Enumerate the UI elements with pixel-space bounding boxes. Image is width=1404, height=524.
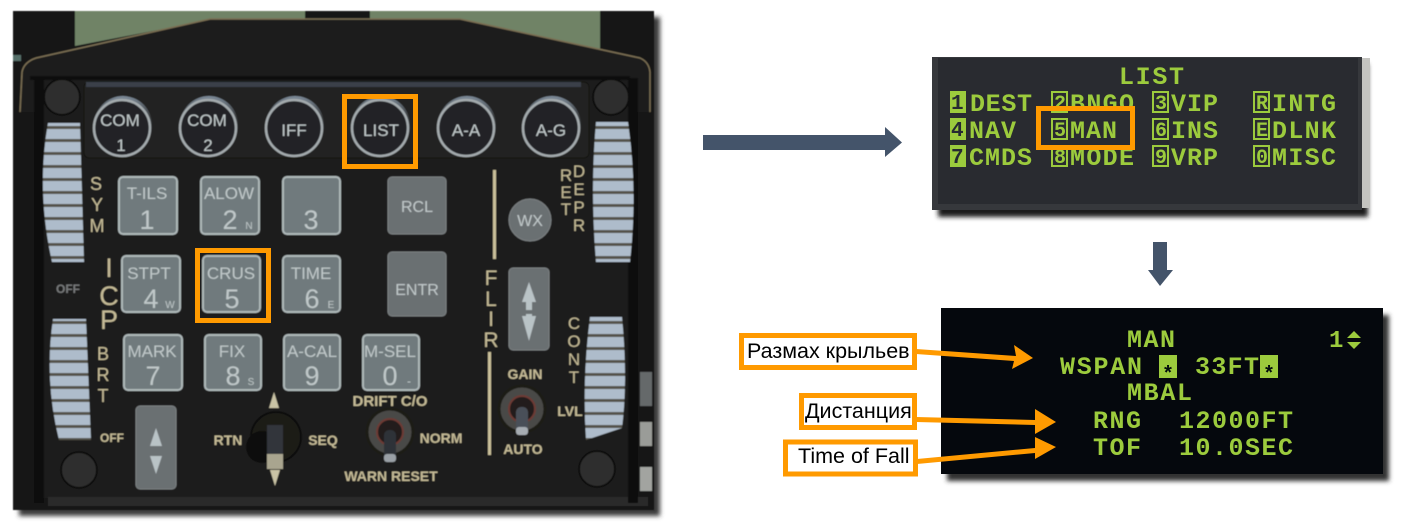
panel: LIST display: [932, 57, 1370, 217]
panel labels: GAIN: [508, 366, 542, 382]
panel labels: DRIFT C/O: [352, 393, 428, 410]
keypad keys: M-SEL: [364, 342, 416, 361]
keypad keys: E: [328, 300, 335, 311]
panel: LIST display: LIST: [1119, 63, 1184, 92]
panel: MAN display: [941, 308, 1389, 481]
arrow: LIST display to MAN display: [1148, 242, 1173, 286]
photo: ICP panel: [13, 11, 660, 516]
panel labels: I: [488, 308, 494, 331]
panel labels: P: [573, 198, 585, 217]
menu row 2: [950, 117, 1336, 146]
panel labels: R: [573, 216, 585, 235]
arrow: panel to LIST display: [703, 127, 902, 157]
panel labels: I: [105, 253, 113, 283]
callout: LIST button highlight: [344, 96, 416, 166]
menu row 2: INS: [1171, 117, 1218, 146]
menu row 1: BNGO: [1070, 90, 1134, 119]
panel labels: OFF: [56, 282, 80, 296]
panel labels: B: [97, 344, 109, 364]
panel labels: T: [561, 200, 571, 219]
panel labels: SEQ: [308, 432, 338, 448]
panel labels: WARN RESET: [344, 468, 438, 484]
menu row 3: MODE: [1070, 144, 1134, 173]
toggles: [246, 386, 545, 486]
panel labels: AUTO: [503, 441, 543, 457]
panel: MAN display: MBAL: [1127, 379, 1192, 408]
callout: CRUS key highlight: [198, 250, 268, 320]
menu row 3: 9: [1155, 147, 1167, 170]
menu row 3: MISC: [1272, 144, 1336, 173]
menu row 3: 8: [1054, 147, 1066, 170]
keypad keys: [119, 177, 551, 489]
panel labels: O: [567, 332, 581, 351]
keypad keys: 0: [382, 361, 398, 391]
panel labels: E: [573, 180, 585, 199]
panel: MAN display: *: [1263, 364, 1275, 387]
panel labels: NORM: [420, 430, 462, 446]
round buttons: LIST: [363, 121, 399, 140]
panel labels: OFF: [100, 431, 124, 445]
menu row 3: CMDS: [969, 144, 1032, 173]
panel: MAN display: MAN: [1127, 326, 1175, 355]
panel: MAN display: 12000FT: [1179, 407, 1293, 436]
round buttons: [94, 96, 581, 156]
keypad keys: S: [248, 377, 255, 388]
keypad keys: ENTR: [395, 282, 439, 299]
screws: [44, 79, 629, 488]
round buttons: A-G: [536, 121, 566, 140]
menu row 1: [950, 90, 1336, 119]
panel labels: C: [568, 314, 580, 333]
keypad keys: 3: [303, 205, 319, 235]
keypad keys: T-ILS: [127, 184, 167, 203]
keypad keys: ALOW: [204, 184, 254, 203]
keypad keys: 9: [304, 361, 320, 391]
menu row 3: [950, 144, 1336, 173]
arrow: wingspan pointer: [916, 345, 1033, 369]
wheels: [43, 122, 634, 440]
menu row 3: 7: [951, 147, 964, 170]
panel body: [20, 19, 650, 498]
keypad keys: STPT: [127, 264, 171, 283]
panel labels: N: [568, 350, 580, 369]
round buttons: IFF: [281, 121, 307, 140]
panel: MAN display: WSPAN: [1060, 353, 1142, 382]
panel labels: F: [485, 267, 497, 290]
panel labels: S: [90, 174, 102, 194]
arrow: time of fall pointer: [917, 437, 1056, 464]
panel: MAN display: TOF: [1093, 434, 1141, 463]
keypad keys: CRUS: [207, 264, 255, 283]
panel labels: T: [569, 368, 579, 387]
label: time of fall: Time of Fall: [798, 444, 910, 468]
keypad keys: WX: [517, 213, 543, 230]
panel labels: Y: [91, 195, 103, 215]
panel labels: L: [485, 288, 497, 311]
keypad keys: RCL: [401, 199, 433, 216]
panel labels: RTN: [214, 432, 242, 448]
label: time of fall: [786, 442, 916, 474]
panel labels: R: [483, 329, 499, 352]
menu row 1: VIP: [1171, 90, 1218, 119]
menu row 2: NAV: [969, 117, 1016, 146]
menu row 1: INTG: [1272, 90, 1336, 119]
menu row 3: VRP: [1171, 144, 1218, 173]
panel labels: [56, 162, 585, 484]
menu row 1: 2: [1054, 93, 1066, 116]
keypad keys: 2: [222, 205, 238, 235]
round buttons: 1: [116, 136, 126, 155]
keypad keys: 5: [224, 284, 240, 314]
panel labels: R: [560, 166, 572, 185]
panel labels: T: [98, 386, 108, 406]
keypad keys: A-CAL: [287, 342, 337, 361]
menu row 2: 6: [1155, 120, 1167, 143]
round buttons: 2: [203, 136, 213, 155]
arrow: range pointer: [916, 409, 1056, 434]
round buttons: A-A: [452, 121, 481, 140]
label: wingspan: Размах крыльев: [747, 339, 910, 363]
round buttons: COM: [100, 111, 140, 130]
panel: MAN display: *: [1162, 364, 1174, 387]
panel labels: R: [96, 365, 110, 385]
panel labels: M: [90, 216, 104, 236]
menu row 2: DLNK: [1272, 117, 1336, 146]
keypad keys: 7: [145, 361, 161, 391]
round buttons: COM: [187, 111, 227, 130]
keypad keys: -: [407, 374, 411, 388]
panel labels: P: [100, 305, 118, 335]
menu row 2: 5: [1054, 120, 1066, 143]
keypad keys: MARK: [127, 342, 177, 361]
label: range: Дистанция: [805, 399, 912, 423]
menu row 2: E: [1256, 120, 1268, 143]
keypad keys: N: [245, 221, 253, 232]
menu row 1: R: [1256, 93, 1268, 116]
panel: MAN display: RNG: [1093, 407, 1141, 436]
menu row 2: MAN: [1070, 117, 1117, 146]
keypad keys: 6: [304, 284, 320, 314]
menu row 1: 1: [951, 93, 964, 116]
panel: MAN display: 33FT: [1195, 353, 1259, 382]
menu row 3: 0: [1256, 147, 1268, 170]
keypad keys: W: [165, 300, 175, 311]
keypad keys: TIME: [291, 264, 331, 283]
keypad keys: FIX: [219, 342, 245, 361]
keypad keys: 4: [143, 284, 159, 314]
panel labels: E: [560, 183, 572, 202]
panel: MAN display: 1: [1329, 328, 1343, 355]
panel labels: LVL: [557, 403, 583, 419]
panel labels: C: [99, 281, 119, 311]
panel: MAN display: 10.0SEC: [1179, 434, 1293, 463]
keypad keys: 1: [139, 205, 155, 235]
keypad keys: 8: [225, 361, 241, 391]
panel labels: D: [573, 162, 585, 181]
menu row 1: 3: [1155, 93, 1167, 116]
callout: 5 MAN highlight: [1038, 108, 1132, 148]
menu row 1: DEST: [970, 90, 1032, 119]
menu row 2: 4: [951, 120, 964, 143]
